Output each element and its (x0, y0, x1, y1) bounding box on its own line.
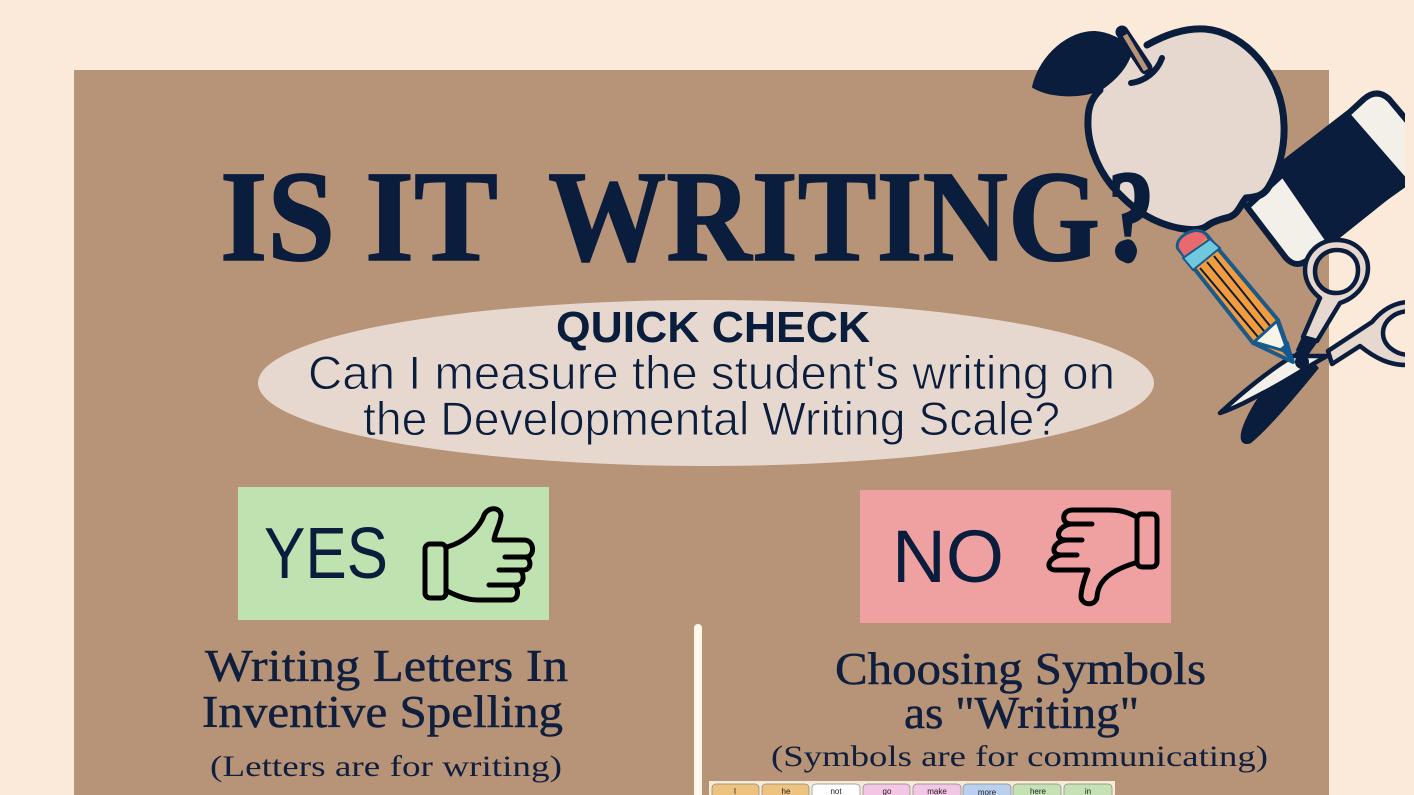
title: IS (220, 145, 335, 289)
symbol cell: I (712, 784, 759, 795)
symbol cell: more (963, 784, 1011, 795)
quick check heading: QUICK CHECK (556, 303, 870, 352)
left heading: Inventive Spelling (202, 687, 563, 737)
symbol cell: make (913, 784, 961, 795)
left heading: Writing Letters In (205, 641, 568, 691)
icon: thumbs down (1049, 510, 1157, 604)
symbol board (709, 781, 1115, 795)
center divider (694, 624, 702, 795)
question line 2: the Developmental Writing Scale? (363, 392, 1060, 445)
icon: scissors (1220, 240, 1414, 443)
question line 1: Can I measure the student's writing on (308, 346, 1115, 399)
no panel (860, 490, 1171, 623)
symbol cell: he (762, 784, 809, 795)
left heading (202, 641, 568, 737)
symbol cell: here (1013, 784, 1061, 795)
left subheading: (Letters are for writing) (210, 750, 562, 783)
right subheading: (Symbols are for communicating) (771, 740, 1268, 773)
right heading: Choosing Symbols (835, 644, 1206, 694)
icon: eraser bottle (1247, 94, 1414, 264)
title (220, 145, 1154, 289)
icon: thumbs up (425, 509, 533, 600)
quick check oval (258, 300, 1154, 466)
symbol cell: not (812, 784, 860, 795)
symbol cell: go (863, 784, 910, 795)
title: IT (365, 145, 498, 289)
icon: apple (1033, 29, 1284, 230)
yes label: YES (264, 514, 388, 594)
symbol cell: in (1064, 784, 1112, 795)
right heading (835, 644, 1206, 738)
icon: pencil (1178, 231, 1293, 362)
yes panel (238, 487, 549, 620)
title: WRITING (548, 145, 1100, 289)
no label: NO (892, 515, 1004, 598)
title: ? (1108, 145, 1154, 289)
right heading: as "Writing" (904, 688, 1139, 738)
